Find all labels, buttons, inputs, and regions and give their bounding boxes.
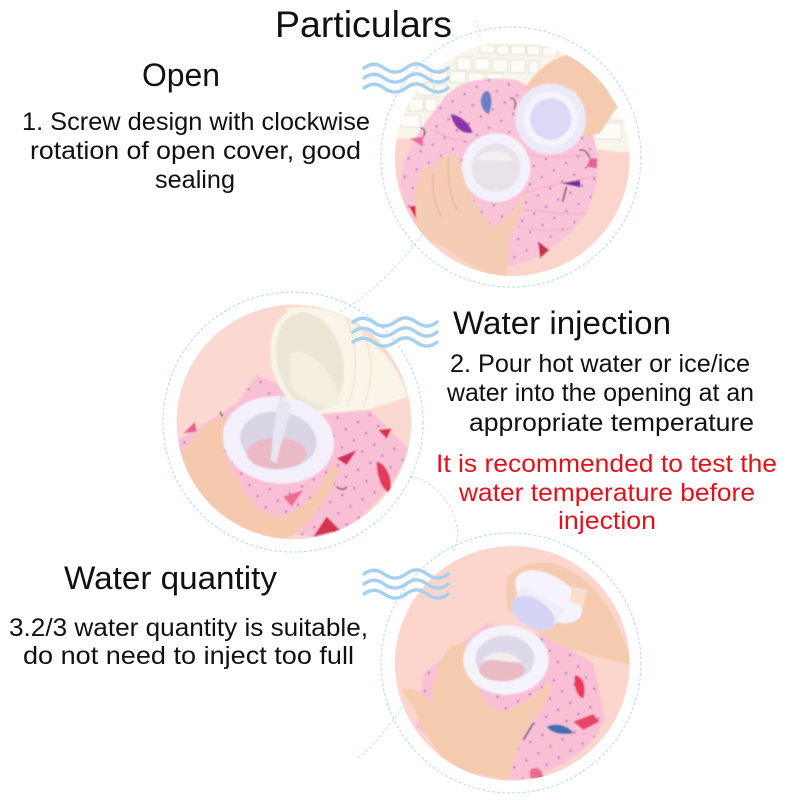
photo: pouring water into ice bag <box>173 299 417 543</box>
warning note: It is recommended to test the <box>436 450 777 478</box>
body: water injection: water into the opening at an <box>446 379 754 407</box>
umbrella prints <box>183 412 392 537</box>
upper hand <box>507 562 632 665</box>
photo circle: water quantity <box>381 533 641 793</box>
body: water injection: 2. Pour hot water or ice/ice <box>450 350 750 378</box>
hand <box>182 415 338 539</box>
heading: water quantity: Water quantity <box>64 560 277 596</box>
body: open: sealing <box>155 166 235 194</box>
photo circle: water injection <box>163 292 423 552</box>
heading: water injection: Water injection <box>453 305 671 341</box>
screw opening <box>462 133 530 202</box>
water stream <box>271 395 292 463</box>
photo: hands unscrewing cap on pink ice bag <box>395 44 630 276</box>
cap <box>510 570 583 632</box>
text block: open <box>22 57 370 194</box>
text block: water injection <box>436 305 777 535</box>
photo: hand holding cap over opening <box>392 543 635 787</box>
body: water quantity <box>9 614 368 670</box>
body: water injection <box>446 350 754 437</box>
body: open <box>22 108 370 194</box>
cap <box>515 84 586 154</box>
umbrella prints <box>523 675 599 778</box>
body: open: rotation of open cover, good <box>30 137 361 165</box>
dashed ring: water injection <box>163 292 423 552</box>
warning note <box>436 450 777 535</box>
body: open: 1. Screw design with clockwise <box>22 108 370 136</box>
lower hand <box>402 643 550 780</box>
warning note: injection <box>558 507 656 535</box>
bottle <box>287 307 408 414</box>
icon: water waves 1 <box>364 64 448 92</box>
connecting dashed curves <box>340 20 480 758</box>
dashed ring: open <box>381 27 641 287</box>
umbrella prints <box>409 91 597 258</box>
icon: water waves 3 <box>364 570 448 598</box>
body: water quantity: 3.2/3 water quantity is suitable, <box>9 614 368 642</box>
photo circle: open <box>381 27 641 287</box>
hand right <box>520 55 617 137</box>
body: water injection: appropriate temperature <box>469 409 754 437</box>
text block: water quantity <box>9 560 368 670</box>
icon: water waves 2 <box>353 318 437 346</box>
title: Particulars <box>275 4 452 45</box>
ring <box>222 396 335 484</box>
body: water quantity: do not need to inject too full <box>23 642 354 670</box>
warning note: water temperature before <box>458 479 755 507</box>
opening <box>463 625 549 695</box>
heading: open: Open <box>142 57 220 93</box>
hand holding <box>416 154 525 277</box>
dashed ring: water quantity <box>381 533 641 793</box>
